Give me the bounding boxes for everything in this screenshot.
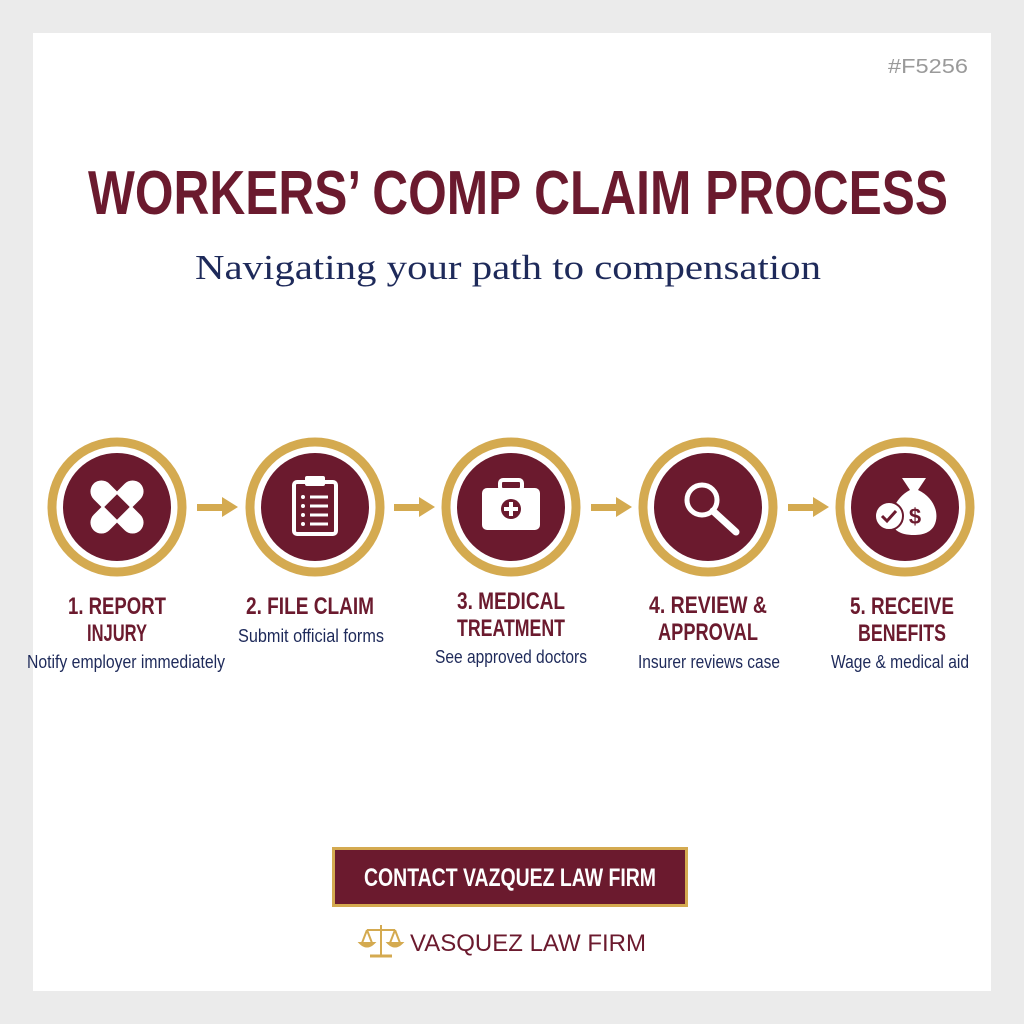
arrow 4 [788, 497, 829, 517]
subtitle: Navigating your path to compensation [195, 248, 821, 287]
label: 1. REPORT [68, 593, 166, 620]
logo: VASQUEZ LAW FIRM [410, 930, 646, 957]
step 3: TREATMENT [457, 615, 565, 642]
step 5 [831, 442, 970, 672]
icon: magnifier [643, 442, 773, 572]
logo [360, 925, 646, 957]
step 1 [27, 442, 225, 672]
step 3 [435, 442, 587, 667]
arrow 2 [394, 497, 435, 517]
icon: scales [360, 925, 402, 956]
step 2 [238, 442, 384, 646]
step 3: See approved doctors [435, 647, 587, 667]
label: 4. REVIEW & [649, 592, 767, 619]
step 1: INJURY [87, 620, 147, 647]
step 5: BENEFITS [858, 620, 946, 647]
arrow 3 [591, 497, 632, 517]
step 5: Wage & medical aid [831, 652, 969, 672]
step 4 [638, 442, 780, 672]
icon: money bag: $ [909, 504, 921, 529]
button: contact: CONTACT VAZQUEZ LAW FIRM [364, 864, 656, 892]
arrow 1 [197, 497, 238, 517]
icon: clipboard [250, 442, 380, 572]
step 4: Insurer reviews case [638, 652, 780, 672]
icon: medical kit [446, 442, 576, 572]
label: 3. MEDICAL [457, 588, 565, 615]
icon: bandage circle [52, 442, 182, 572]
step 4: APPROVAL [658, 619, 758, 646]
label: 2. FILE CLAIM [246, 593, 374, 620]
icon: money bag [840, 442, 970, 572]
step 2: Submit official forms [238, 626, 384, 646]
step 1: Notify employer immediately [27, 652, 225, 672]
label: 5. RECEIVE [850, 593, 954, 620]
button: contact [334, 848, 686, 906]
code tag: #F5256 [888, 56, 968, 78]
